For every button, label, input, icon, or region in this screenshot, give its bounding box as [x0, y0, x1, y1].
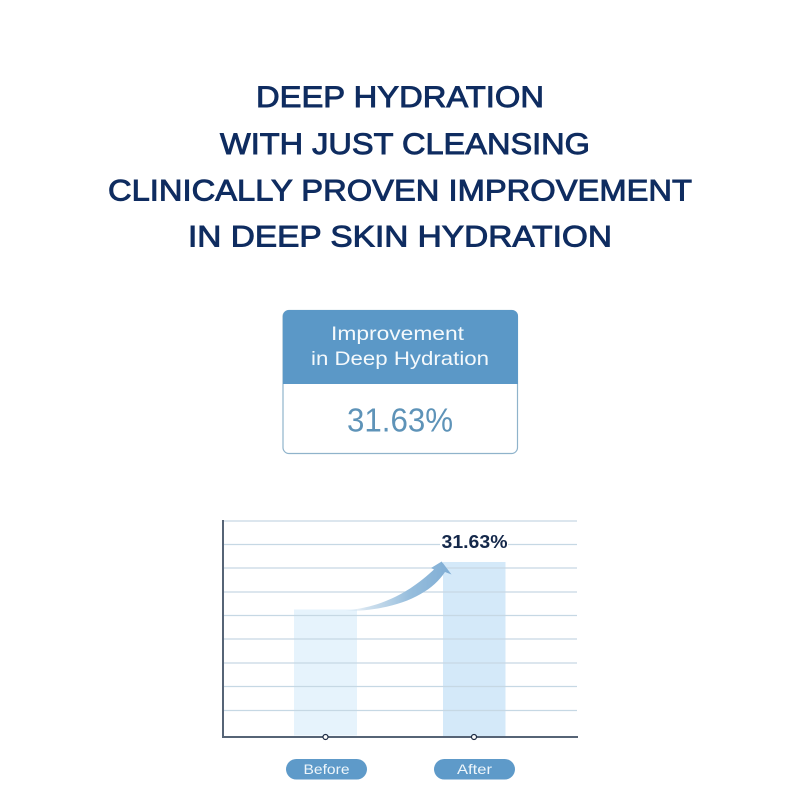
bar: after: [443, 562, 506, 736]
axis marker: after: [472, 734, 476, 740]
title: [108, 81, 692, 254]
bar chart: [223, 520, 578, 740]
stat label: in Deep Hydration: [311, 348, 489, 370]
title: DEEP HYDRATION: [256, 81, 544, 114]
arrow: growth curve: [345, 562, 452, 611]
title: IN DEEP SKIN HYDRATION: [188, 220, 612, 254]
title: CLINICALLY PROVEN IMPROVEMENT: [108, 174, 692, 208]
chart value label: 31.63%: [442, 531, 508, 552]
pill: before: [286, 759, 367, 780]
pill: before: Before: [304, 761, 350, 777]
axis marker: before: [323, 734, 328, 740]
stat value: 31.63%: [347, 402, 453, 440]
stat label: Improvement: [331, 323, 465, 345]
stat header: [283, 310, 518, 384]
pill: after: After: [457, 761, 492, 777]
axes: [223, 520, 578, 737]
pill: after: [434, 759, 515, 780]
stat label: [311, 323, 489, 370]
panel: improvement stat: [283, 310, 518, 454]
title: WITH JUST CLEANSING: [220, 128, 590, 161]
bar: before: [294, 610, 357, 736]
